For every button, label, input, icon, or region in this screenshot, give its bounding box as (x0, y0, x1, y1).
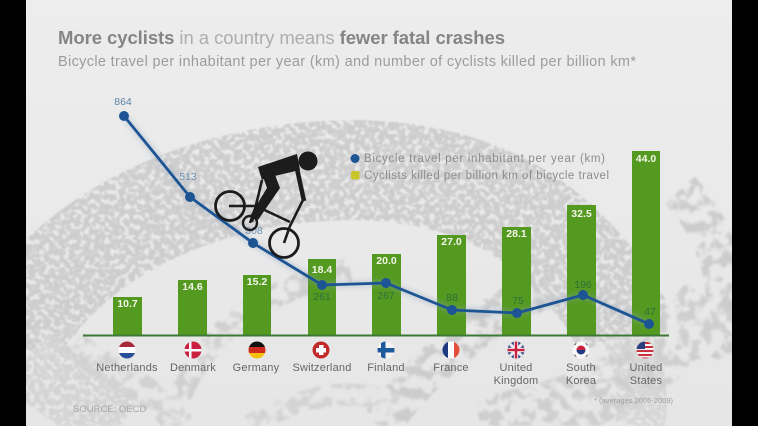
bar chart: cyclists killed per billion km: 10.7 (117, 298, 138, 310)
bar chart: cyclists killed per billion km: 27.0 (441, 236, 462, 248)
legend: Bicycle travel per inhabitant per year (km) (364, 153, 605, 165)
line chart: bicycle travel: 88 (446, 292, 458, 304)
bar chart: cyclists killed per billion km: 44.0 (636, 153, 656, 165)
line chart: bicycle travel: 261 (313, 291, 331, 303)
bar chart: cyclists killed per billion km: 28.1 (506, 228, 527, 240)
country labels: States (630, 375, 662, 387)
flag: Finland (378, 342, 394, 358)
flag: Netherlands (118, 342, 136, 358)
line chart: bicycle travel: 267 (377, 290, 395, 302)
country labels: Germany (233, 362, 280, 374)
legend (350, 153, 609, 182)
flag: United States (636, 342, 654, 358)
country labels: Denmark (170, 362, 216, 374)
legend: Cyclists killed per billion km of bicycle travel (364, 170, 609, 182)
bar chart: cyclists killed per billion km: 32.5 (571, 208, 592, 220)
flag: Denmark (184, 342, 202, 358)
flag: South Korea (572, 342, 590, 358)
flag: France (442, 342, 460, 358)
country labels: United (500, 362, 532, 374)
country labels: Switzerland (292, 362, 352, 374)
bar chart: cyclists killed per billion km (113, 151, 660, 335)
flag: Switzerland (312, 342, 330, 358)
line chart: bicycle travel: 47 (644, 306, 656, 318)
line chart: bicycle travel: 864 (114, 96, 132, 108)
bar chart: cyclists killed per billion km: 18.4 (312, 264, 332, 276)
country labels: Kingdom (494, 375, 538, 387)
line chart: bicycle travel: 308 (245, 225, 263, 237)
flag: United Kingdom (508, 342, 524, 358)
bar chart: cyclists killed per billion km: 14.6 (182, 281, 203, 293)
country labels: Netherlands (96, 362, 158, 374)
line chart: bicycle travel: 196 (574, 279, 592, 291)
bar chart: cyclists killed per billion km: 20.0 (376, 255, 397, 267)
country labels: Korea (566, 375, 597, 387)
title: More cyclists in a country means fewer fatal crashes (58, 27, 505, 48)
footnote: * (averages 2006-2009) (594, 396, 674, 405)
line chart: bicycle travel: 513 (179, 171, 197, 183)
country labels: United (630, 362, 662, 374)
baseline axis (83, 334, 669, 336)
left black bar (0, 0, 26, 426)
line chart: bicycle travel: 75 (512, 295, 524, 307)
country labels (96, 362, 662, 387)
background tyre texture (10, 170, 727, 426)
country labels: South (566, 362, 596, 374)
country labels: Finland (367, 362, 405, 374)
line chart: bicycle travel (114, 96, 656, 329)
country labels: France (433, 362, 469, 374)
subtitle: Bicycle travel per inhabitant per year (km) and number of cyclists killed per billion km* (58, 54, 636, 70)
bar chart: cyclists killed per billion km: 15.2 (247, 276, 267, 288)
icon: cyclist (216, 152, 318, 258)
right black bar (732, 0, 758, 426)
source note: SOURCE: OECD (73, 404, 147, 415)
flag: Germany (248, 342, 266, 358)
